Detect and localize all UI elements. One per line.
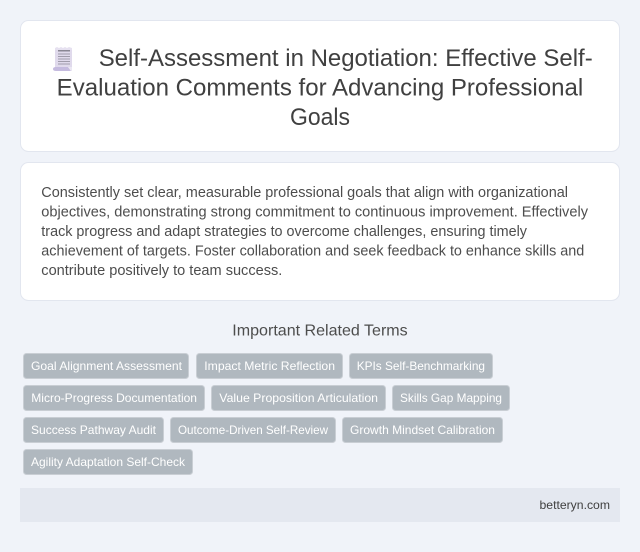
panel: summary text: achievement of targets. Foster collaboration and seek feedback to enhance skills and — [41, 244, 584, 260]
tag: Success Pathway Audit — [24, 418, 164, 442]
tag: Micro-Progress Documentation — [24, 386, 204, 410]
tag list — [24, 354, 510, 474]
title: Goals — [290, 104, 350, 131]
tag: KPIs Self-Benchmarking: KPIs Self-Benchmarking — [357, 359, 485, 373]
tag: KPIs Self-Benchmarking — [350, 354, 492, 378]
tag: Success Pathway Audit: Success Pathway Audit — [31, 423, 157, 437]
tag: Goal Alignment Assessment — [24, 354, 188, 378]
tag: Growth Mindset Calibration: Growth Mindset Calibration — [350, 423, 495, 437]
tag: Micro-Progress Documentation: Micro-Progress Documentation — [31, 391, 197, 405]
heading: related terms: Important Related Terms — [232, 323, 408, 340]
title: Self-Assessment in Negotiation: Effective Self- — [99, 45, 593, 72]
tag: Impact Metric Reflection: Impact Metric Reflection — [204, 359, 335, 373]
tag: Value Proposition Articulation: Value Proposition Articulation — [219, 391, 378, 405]
panel: summary text — [20, 162, 620, 300]
footer — [20, 488, 620, 522]
tag: Value Proposition Articulation — [212, 386, 386, 410]
tag: Outcome-Driven Self-Review: Outcome-Driven Self-Review — [178, 423, 328, 437]
tag: Agility Adaptation Self-Check: Agility Adaptation Self-Check — [31, 455, 186, 469]
tag: Skills Gap Mapping: Skills Gap Mapping — [400, 391, 502, 405]
title — [57, 45, 593, 131]
tag: Skills Gap Mapping — [392, 386, 510, 410]
tag: Impact Metric Reflection — [196, 354, 342, 378]
tag: Outcome-Driven Self-Review — [170, 418, 336, 442]
panel: summary text: track progress and adapt strategies to overcome challenges, ensuring timely — [41, 224, 528, 240]
footer: betteryn.com — [540, 498, 610, 512]
tag: Growth Mindset Calibration — [342, 418, 502, 442]
tag: Agility Adaptation Self-Check — [24, 450, 192, 474]
icon: document scroll — [53, 47, 72, 71]
panel: summary text: contribute positively to team success. — [41, 263, 282, 279]
title: Evaluation Comments for Advancing Professional — [57, 74, 583, 102]
tag: Goal Alignment Assessment: Goal Alignment Assessment — [31, 359, 183, 373]
panel: summary text: Consistently set clear, measurable professional goals that align with organizational — [41, 185, 568, 201]
panel: title card — [20, 20, 620, 152]
panel: summary text: objectives, demonstrating strong commitment to continuous improvement. Effectively — [41, 204, 589, 220]
